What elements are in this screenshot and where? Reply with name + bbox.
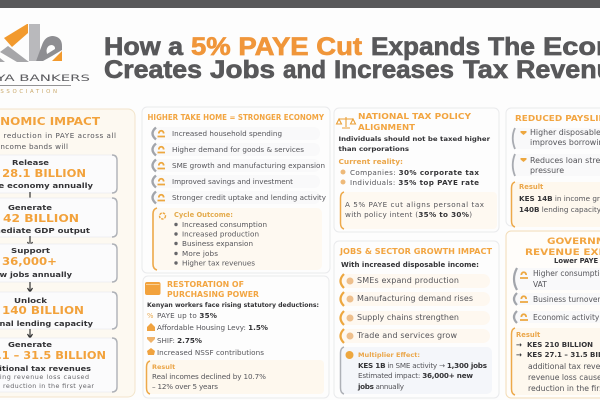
heading: HIGHER TAKE HOME = STRONGER ECONOMY — [148, 113, 325, 122]
list: benefits: SME growth and manufacturing expansion — [172, 161, 325, 170]
callout: cycle outcome: Increased consumption — [182, 220, 267, 229]
callout: policy intent: with policy intent (35% to 30%) — [345, 210, 472, 219]
arrow — [28, 192, 32, 202]
top bar — [0, 0, 600, 8]
panel: restoration of purchasing power — [143, 276, 329, 398]
list: sectors: Supply chains strengthen — [357, 313, 459, 322]
step: jobs: Support — [11, 246, 51, 255]
list: sectors — [340, 274, 490, 343]
callout: result: Result — [519, 183, 544, 191]
intro text — [0, 131, 116, 151]
callout: result — [511, 182, 600, 227]
callout: result: Real incomes declined by 10.7% — [152, 372, 266, 381]
step: jobs — [0, 244, 117, 282]
callout: multiplier effect: Estimated impact: 36,000+ new — [358, 371, 473, 380]
list: sectors: SMEs expand production — [357, 276, 459, 285]
callout: multiplier effect — [340, 347, 492, 394]
list: benefits — [152, 127, 327, 204]
title: Creates — [104, 56, 202, 84]
callout: multiplier effect: Multiplier Effect: — [358, 351, 420, 359]
list: benefits: Higher demand for goods & services — [172, 145, 304, 154]
heading: ALIGNMENT — [358, 123, 416, 132]
panel: national tax policy alignment — [334, 108, 499, 232]
step: jobs: 36,000+ — [2, 255, 57, 268]
step: GDP output — [0, 198, 117, 237]
lead text: Kenyan workers face rising statutory deductions: — [147, 302, 319, 309]
list: sectors: Manufacturing demand rises — [357, 294, 473, 303]
callout: cycle outcome — [152, 208, 322, 270]
step: GDP output: Generate — [8, 203, 52, 212]
list: deductions: % — [147, 312, 154, 320]
arrow — [28, 329, 32, 338]
heading — [358, 112, 472, 132]
list: revenue drivers: VAT — [533, 280, 547, 289]
title: Jobs — [210, 56, 275, 84]
title: Increases — [334, 56, 454, 84]
heading — [167, 280, 259, 299]
lead text: than corporations — [338, 146, 409, 153]
callout: result: – 12% over 5 years — [152, 382, 218, 391]
callout: cycle outcome: Increased production — [182, 230, 259, 238]
item: borrowing — [511, 128, 600, 149]
step: lending capacity — [0, 292, 117, 329]
item: loan stress: pressure — [530, 166, 564, 175]
title — [104, 33, 600, 84]
list: benefits: Increased household spending — [172, 129, 282, 138]
callout: result: → — [516, 341, 522, 349]
callout: policy intent: A 5% PAYE cut aligns personal tax — [345, 200, 485, 209]
arrow — [28, 236, 32, 246]
callout: multiplier effect: jobs annually — [357, 382, 405, 391]
heading: PURCHASING POWER — [167, 290, 259, 299]
list: benefits: Stronger credit uptake and lending activity — [172, 193, 327, 202]
panel: jobs and sector growth impact — [334, 241, 499, 398]
callout: cycle outcome: Business expansion — [182, 239, 253, 248]
lead text — [338, 136, 491, 153]
callout: multiplier effect: KES 1B in SME activity → 1,300 jobs — [358, 361, 487, 370]
title: and — [283, 56, 326, 84]
callout: result: → — [516, 351, 522, 359]
list: deductions: Increased NSSF contributions — [157, 348, 264, 357]
current reality — [338, 158, 479, 187]
step: tax revenues — [0, 338, 117, 392]
panel: government revenue expansion — [506, 231, 600, 398]
title: How a — [104, 33, 184, 61]
heading: JOBS & SECTOR GROWTH IMPACT — [339, 247, 493, 256]
list: deductions: SHIF: 2.75% — [157, 336, 202, 345]
heading: RESTORATION OF — [167, 280, 244, 289]
title: Tax — [463, 56, 508, 84]
list: revenue drivers — [513, 268, 600, 323]
list: sectors: Trade and services grow — [356, 331, 457, 340]
arrow — [28, 282, 32, 292]
panel: higher take home — [142, 107, 330, 273]
current reality: Companies: 30% corporate tax — [350, 168, 479, 177]
callout: cycle outcome: Cycle Outcome: — [174, 211, 233, 219]
lead text: With increased disposable income: — [341, 261, 479, 269]
title: The — [488, 33, 535, 61]
title: 5% PAYE Cut — [191, 33, 363, 61]
callout: cycle outcome: More jobs — [182, 249, 218, 258]
step: lending capacity: Unlock — [14, 296, 48, 305]
current reality: Individuals: 35% top PAYE rate — [350, 178, 479, 187]
title: Expands — [371, 33, 480, 61]
step: tax revenues: Generate — [8, 340, 52, 349]
callout: cycle outcome: Higher tax revenues — [182, 258, 255, 268]
icon: scales — [336, 117, 356, 128]
list: deductions — [147, 311, 268, 357]
callout: result — [146, 360, 324, 394]
step: release: Release — [12, 158, 49, 167]
callout: result: Result — [516, 331, 541, 339]
list: deductions: Affordable Housing Levy: 1.5% — [157, 323, 268, 332]
item: loan stress — [511, 154, 600, 176]
callout: result: Result — [152, 363, 175, 371]
heading: NATIONAL TAX POLICY — [358, 112, 472, 121]
step: release — [0, 155, 117, 193]
list: benefits: Improved savings and investment — [172, 177, 293, 186]
lead text: Individuals should not be taxed higher — [338, 136, 491, 143]
panel: reduced payslip deductions — [506, 108, 600, 227]
icon: wallet — [145, 282, 160, 295]
callout: policy intent — [340, 192, 497, 229]
current reality: Current reality: — [338, 158, 403, 166]
callout: result: 140B lending capacity — [519, 205, 600, 214]
heading — [525, 237, 600, 258]
panel: economic impact — [0, 109, 135, 397]
list: deductions: PAYE up to 35% — [157, 311, 217, 320]
logo: Kenya Bankers Association — [0, 24, 90, 95]
callout: result: KES 210 BILLION — [527, 341, 593, 349]
callout: result — [511, 328, 600, 395]
